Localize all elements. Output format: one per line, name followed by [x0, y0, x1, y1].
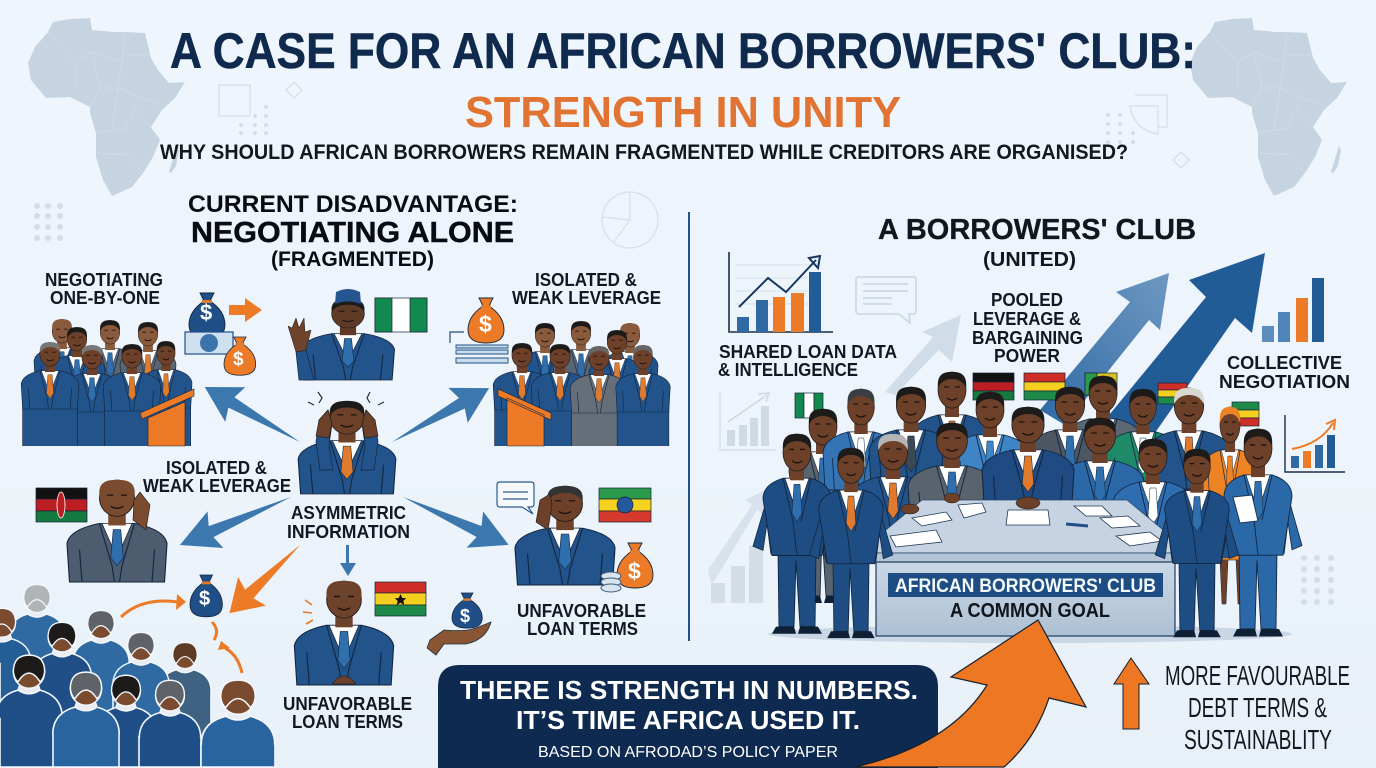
left heading: (FRAGMENTED) — [271, 248, 434, 271]
group: one-by-one — [20, 319, 194, 446]
right labels — [718, 290, 1350, 392]
person: ethiopia — [515, 486, 615, 585]
pale bars — [711, 546, 763, 603]
call to action banner — [438, 665, 938, 768]
favourable terms — [1165, 660, 1350, 755]
right labels: COLLECTIVE — [1227, 353, 1342, 373]
person: nigeria — [288, 289, 394, 380]
right labels: NEGOTIATION — [1219, 372, 1350, 392]
right labels: SHARED LOAN DATA — [719, 342, 897, 362]
bars collective — [1262, 278, 1324, 342]
speech bubble pale — [856, 277, 916, 323]
left labels: INFORMATION — [287, 522, 410, 542]
person: kenya — [67, 480, 167, 582]
podium right — [498, 389, 551, 446]
right labels: LEVERAGE & — [973, 309, 1081, 329]
big orange arrow — [855, 620, 1086, 767]
flag: kenya — [36, 488, 87, 522]
divider — [688, 212, 690, 641]
table — [858, 500, 1191, 636]
left heading — [188, 191, 518, 271]
united front people — [809, 448, 1258, 638]
left heading: CURRENT DISADVANTAGE: — [188, 191, 518, 218]
common goal: A COMMON GOAL — [950, 600, 1110, 622]
orange arrow — [216, 531, 314, 627]
left labels: LOAN TERMS — [527, 619, 638, 639]
right heading: A BORROWERS' CLUB — [878, 214, 1196, 246]
left labels: ISOLATED & — [166, 458, 267, 478]
chart: shared data — [729, 252, 833, 332]
right heading: (UNITED) — [983, 249, 1076, 271]
right heading — [878, 214, 1196, 271]
table: AFRICAN BORROWERS' CLUB — [895, 576, 1156, 597]
subtitle: STRENGTH IN UNITY — [465, 88, 901, 137]
stressed central person — [298, 392, 396, 494]
table banner — [888, 573, 1163, 597]
left labels: NEGOTIATING — [45, 270, 163, 290]
group: isolated right — [492, 321, 670, 446]
united people back row — [779, 372, 1259, 613]
africa map right — [1190, 18, 1347, 196]
left labels: WEAK LEVERAGE — [143, 476, 291, 496]
bag in hand — [427, 593, 491, 655]
crowd backs — [0, 584, 275, 767]
ground shadow — [768, 625, 1292, 643]
right labels: POWER — [994, 346, 1060, 366]
call to action banner: THERE IS STRENGTH IN NUMBERS. — [460, 675, 918, 705]
hands on table — [901, 493, 1040, 514]
right labels: & INTELLIGENCE — [718, 360, 858, 380]
africa map left — [28, 18, 185, 196]
bag in hand: $ — [460, 606, 470, 626]
podium left — [140, 389, 194, 446]
money bag and coins: $ — [628, 558, 641, 584]
up arrow — [1114, 658, 1149, 729]
chart pale — [720, 392, 776, 450]
money icons left: $ — [233, 349, 244, 370]
central money bag — [190, 575, 222, 617]
title: A CASE FOR AN AFRICAN BORROWERS' CLUB: — [170, 23, 1196, 79]
person: ghana — [294, 581, 394, 685]
left labels: UNFAVORABLE — [283, 694, 412, 714]
right labels: BARGAINING — [972, 328, 1083, 348]
left labels — [45, 270, 661, 732]
call to action banner: IT’S TIME AFRICA USED IT. — [516, 705, 860, 735]
left labels: ASYMMETRIC — [291, 503, 406, 523]
flags united — [795, 373, 1259, 426]
money bag and coins — [601, 543, 653, 592]
question: WHY SHOULD AFRICAN BORROWERS REMAIN FRAGMENTED WHILE CREDITORS ARE ORGANISED? — [160, 141, 1128, 164]
left labels: ISOLATED & — [535, 270, 637, 290]
call to action banner: BASED ON AFRODAD’S POLICY PAPER — [538, 744, 838, 761]
money icons left: $ — [200, 300, 212, 325]
right labels: POOLED — [991, 290, 1063, 310]
flag: nigeria — [375, 298, 427, 332]
money icons left — [185, 293, 262, 375]
left labels: UNFAVORABLE — [517, 601, 646, 621]
united people middle row — [753, 407, 1302, 660]
money and papers right: $ — [479, 311, 492, 337]
money and papers right — [450, 298, 508, 363]
central money bag: $ — [199, 588, 210, 610]
speech bubble — [497, 482, 534, 514]
flag: ethiopia — [599, 488, 651, 522]
left labels: LOAN TERMS — [292, 712, 403, 732]
arrows from centre — [172, 370, 517, 576]
left heading: NEGOTIATING ALONE — [191, 217, 514, 249]
rising arrows — [708, 253, 1265, 585]
curved orange arrows — [121, 594, 242, 673]
flag: ghana — [375, 582, 426, 616]
left labels: ONE-BY-ONE — [50, 288, 160, 308]
left labels: WEAK LEVERAGE — [512, 288, 661, 308]
chart right — [1285, 415, 1345, 472]
